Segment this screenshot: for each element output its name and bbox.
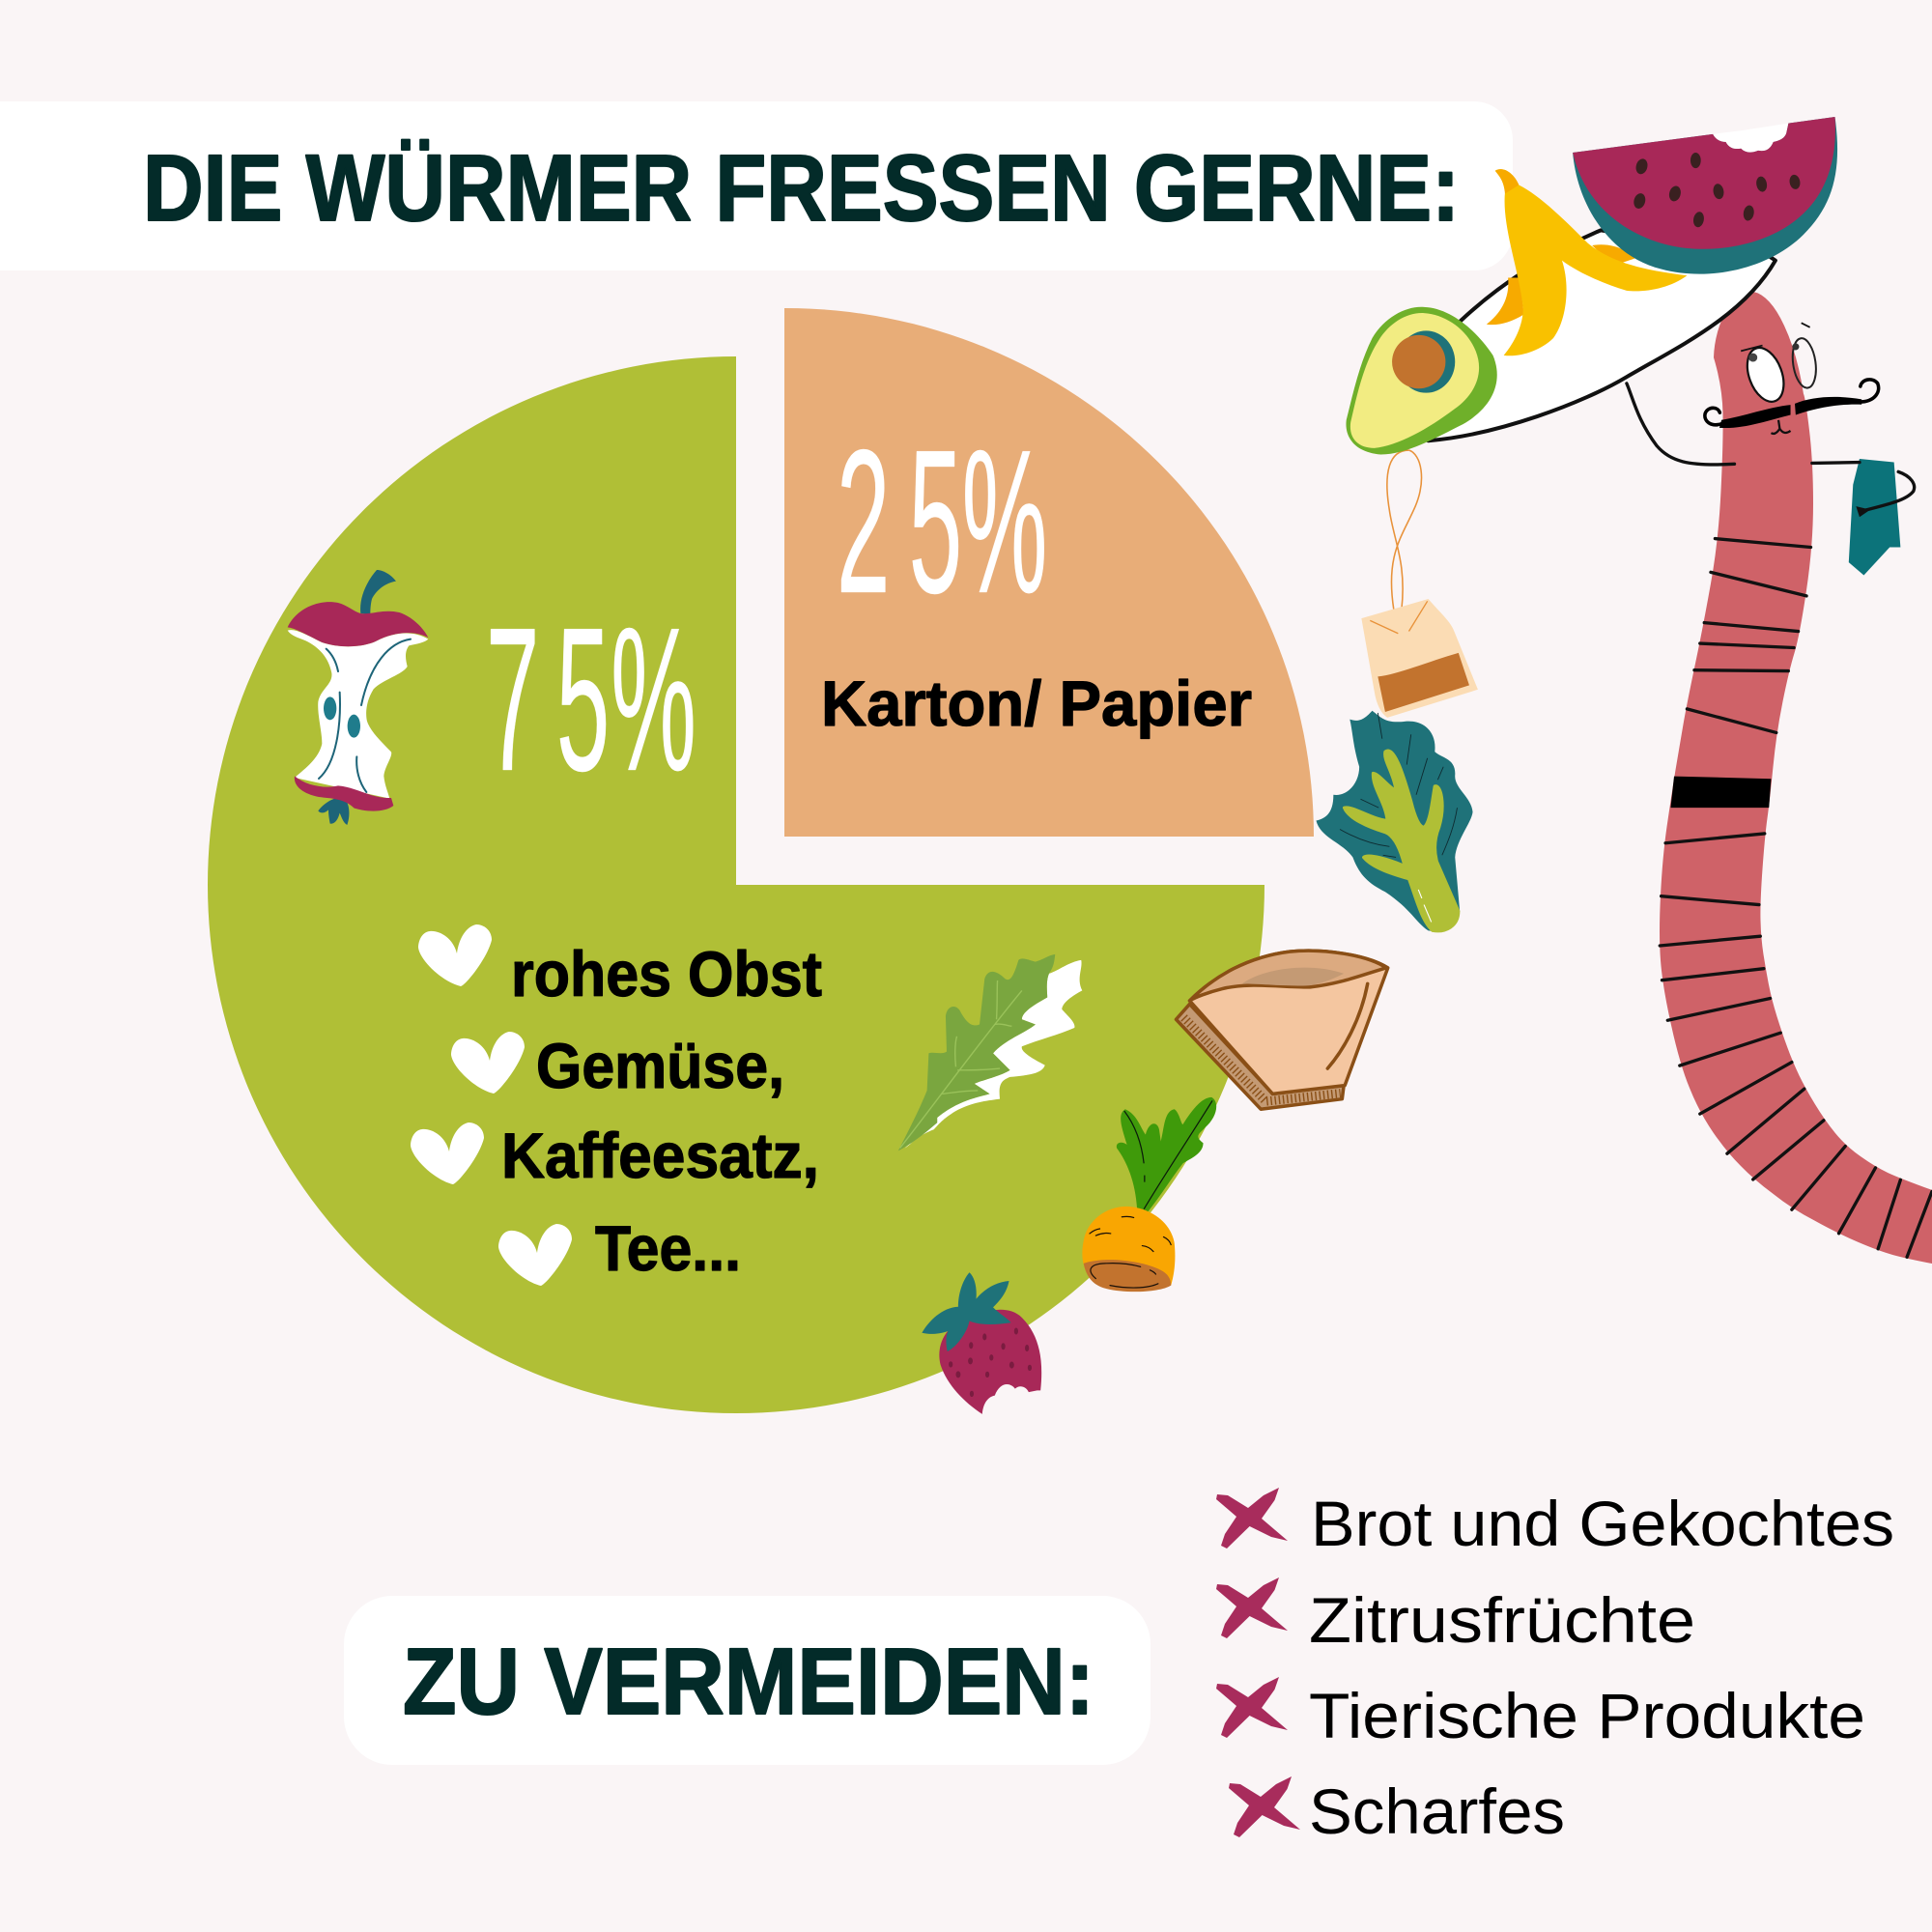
text: Kaffeesatz: Kaffeesatz, <box>501 1120 819 1191</box>
icon: coffee filter <box>1176 951 1388 1109</box>
worm character <box>1627 293 1932 1263</box>
text: Tierische Produkte: Tierische Produkte <box>1309 1680 1865 1751</box>
text: rohes Obst: rohes Obst <box>511 938 822 1009</box>
cross 2 <box>1216 1577 1288 1638</box>
worm face, arms and towel <box>1627 323 1915 576</box>
text: Tee: Tee... <box>595 1212 741 1284</box>
icon: arugula leaf <box>898 954 1082 1151</box>
icon: carrot <box>1082 1097 1216 1292</box>
icon: apple core <box>288 570 428 825</box>
arms <box>1627 384 1915 511</box>
heart: rohes Obst <box>418 924 492 986</box>
moustache <box>1719 397 1861 428</box>
pie slice: 25 percent <box>784 308 1314 837</box>
plate <box>1429 230 1776 440</box>
pie slice: 75 percent <box>208 356 1264 1413</box>
title banner: DIE WÜRMER FRESSEN GERNE: <box>143 135 1460 241</box>
text: Gemüse: Gemüse, <box>536 1030 784 1101</box>
heart: Kaffeesatz <box>411 1122 484 1184</box>
heading banner: zu vermeiden: ZU VERMEIDEN: <box>403 1629 1094 1734</box>
heading banner: zu vermeiden <box>344 1596 1151 1765</box>
label: 75 percent: 75% <box>486 585 696 814</box>
title banner <box>0 101 1513 270</box>
heart: Tee <box>498 1224 572 1286</box>
label: Karton/ Papier: Karton/ Papier <box>821 668 1252 739</box>
text: Zitrusfrüchte: Zitrusfrüchte <box>1309 1584 1695 1656</box>
text: Scharfes: Scharfes <box>1309 1776 1565 1847</box>
icon: banana peel <box>1487 169 1687 355</box>
label: 25 percent: 25% <box>837 408 1047 637</box>
cross 3 <box>1216 1677 1288 1738</box>
plate with food <box>1346 117 1837 718</box>
list: good foods <box>411 924 822 1286</box>
icon: watermelon slice <box>1573 117 1837 274</box>
icon: tea bag <box>1361 450 1478 718</box>
towel <box>1849 459 1900 576</box>
worm body <box>1661 293 1932 1263</box>
worm lower segment lines <box>1660 777 1932 1257</box>
worm segment lines <box>1687 539 1811 732</box>
text: Brot und Gekochtes: Brot und Gekochtes <box>1311 1488 1894 1559</box>
icon: lettuce leaf <box>1316 711 1473 931</box>
cross 4 <box>1229 1776 1300 1837</box>
icon: avocado <box>1346 307 1497 455</box>
pie chart <box>208 308 1314 1413</box>
heart: Gemüse <box>451 1032 525 1094</box>
cross 1 <box>1216 1488 1288 1548</box>
icon: strawberry <box>922 1272 1041 1414</box>
eyes <box>1790 337 1819 389</box>
list: foods to avoid <box>1216 1488 1894 1847</box>
